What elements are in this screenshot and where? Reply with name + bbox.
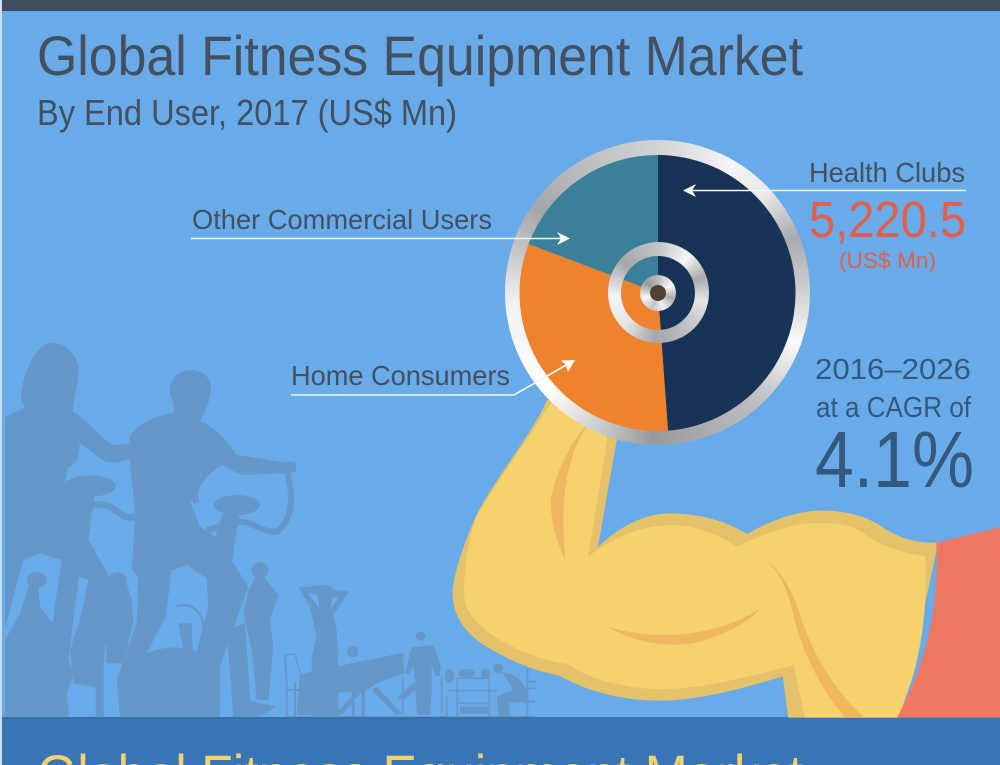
plate rim (505, 140, 810, 445)
top bar (0, 0, 1000, 11)
arm fill (464, 400, 926, 718)
callout: health clubs (683, 157, 966, 273)
bottom band (2, 717, 1000, 765)
silhouette: small gym figures and equipment (283, 585, 536, 717)
silhouette: cyclists (5, 343, 297, 718)
callout: other commercial users (191, 204, 570, 245)
overlap of silhouettes on band (2, 717, 537, 719)
callout: home consumers (291, 360, 575, 395)
plate: pie chart weight (505, 140, 810, 445)
callout: health clubs: (US$ Mn) (839, 248, 936, 273)
hub (640, 275, 676, 311)
callout: other commercial users: Other Commercial Users (192, 204, 492, 235)
callout: health clubs: Health Clubs (809, 157, 965, 188)
callout: home consumers: Home Consumers (291, 360, 510, 391)
bicep crease (608, 609, 760, 645)
callout: health clubs: 5,220.5 (809, 191, 966, 248)
left edge strip (0, 0, 2, 765)
shoulder crease (767, 560, 865, 718)
CAGR stat (815, 354, 974, 504)
CAGR stat: 2016–2026 (815, 354, 971, 386)
arm outline (452, 400, 938, 718)
subtitle: By End User, 2017 (US$ Mn) (37, 92, 457, 133)
hub ring (608, 242, 708, 343)
title: Global Fitness Equipment Market (37, 24, 803, 87)
CAGR stat: 4.1% (815, 415, 974, 504)
axle (650, 285, 666, 301)
pie segments (520, 155, 796, 431)
sleeve (897, 527, 1000, 718)
CAGR stat: at a CAGR of (816, 392, 972, 424)
forearm crease (551, 427, 586, 558)
inner pie segments (621, 256, 695, 330)
